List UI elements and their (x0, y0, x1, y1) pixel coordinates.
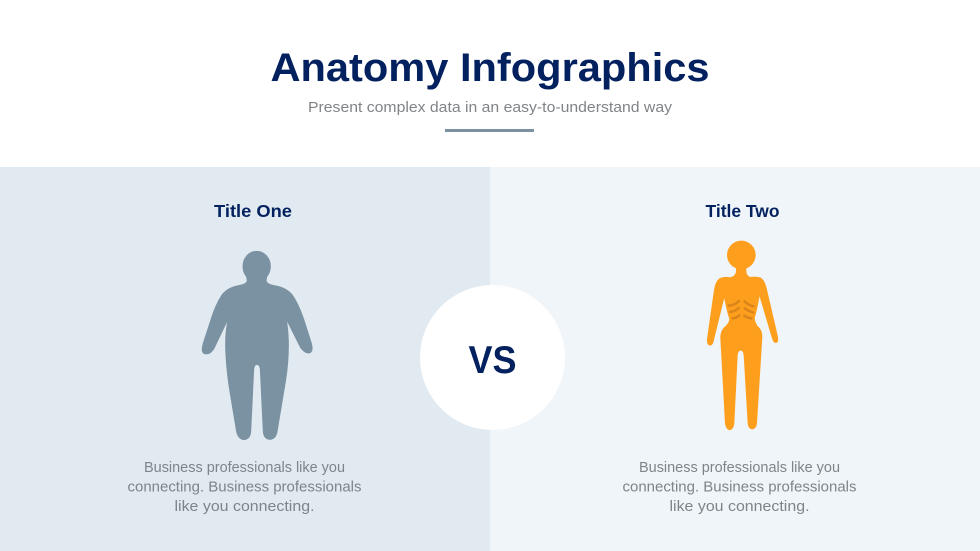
ribs (729, 301, 753, 318)
text block: left description: connecting. Business professionals (128, 480, 362, 496)
title underline (445, 129, 534, 132)
text block: right description: Business professionals like you (639, 460, 840, 476)
panel: right (490, 167, 980, 551)
text block: right description: connecting. Business professionals (622, 480, 856, 496)
subtitle: Present complex data in an easy-to-understand way (308, 99, 673, 116)
text block: right description: like you connecting. (670, 499, 810, 515)
text block: right description (622, 460, 856, 515)
icon: underweight body silhouette with ribs (708, 241, 777, 429)
icon: overweight body silhouette (202, 251, 312, 440)
vs badge: VS (468, 339, 516, 382)
text block: left description (128, 460, 362, 515)
text block: left description: like you connecting. (174, 499, 314, 515)
vs badge (420, 285, 565, 430)
text block: left description: Business professionals like you (144, 460, 345, 476)
heading: title one: Title One (214, 201, 292, 221)
panel: left (0, 167, 490, 551)
title: Anatomy Infographics (270, 46, 710, 90)
heading: title two: Title Two (706, 201, 780, 221)
